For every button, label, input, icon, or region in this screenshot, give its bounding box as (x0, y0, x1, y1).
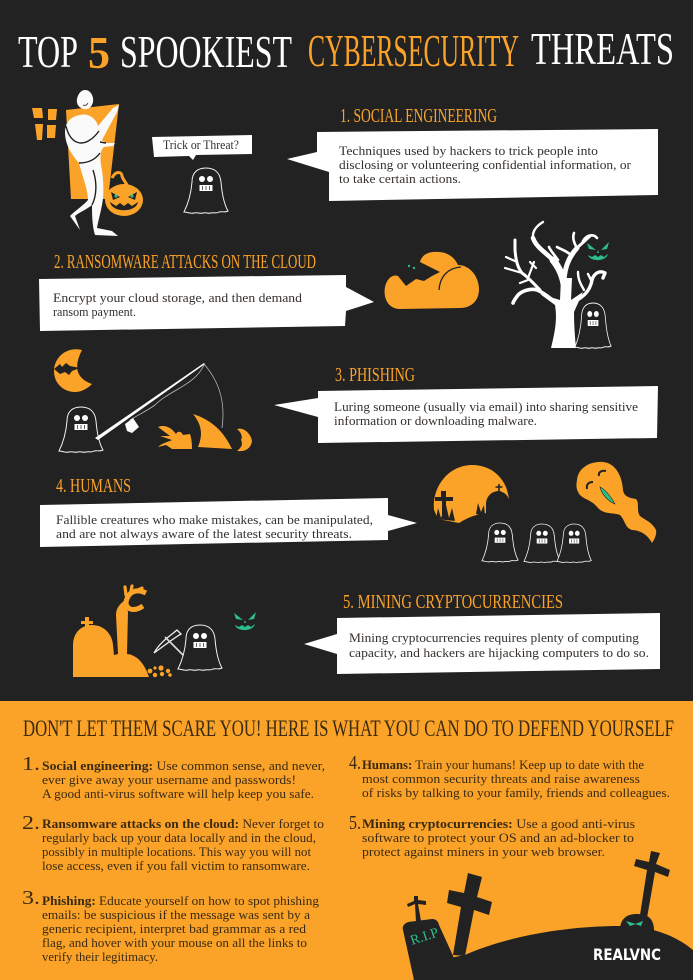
illustration: man at door with windows (32, 90, 119, 236)
tip 2 (22, 812, 324, 873)
icon: green eyes (626, 921, 643, 926)
callout: humans: and are not always aware of the latest security threats. (56, 527, 352, 541)
icon: cloud with bat (385, 252, 479, 309)
heading: ransomware: 2. RANSOMWARE ATTACKS ON THE CLOUD (54, 251, 316, 273)
tip 2: 2. (22, 812, 40, 834)
panel: threat 3 phishing (54, 349, 658, 452)
tip 5 (349, 812, 635, 859)
logo: RealVNC: REALVNC (593, 945, 661, 964)
icon: pumpkin (105, 172, 143, 216)
tip 3: verify their legitimacy. (42, 950, 158, 964)
icon: green jack-o-lantern face (234, 612, 256, 630)
callout: mining: Mining cryptocurrencies requires plenty of computing (349, 631, 640, 645)
tip 2: Ransomware attacks on the cloud: Never forget to (42, 817, 324, 831)
icon: moon with bat (54, 349, 92, 392)
icon: ghost (575, 303, 611, 348)
icon: moon with graveyard (434, 465, 510, 523)
tip 4: most common security threats and raise awareness (362, 772, 640, 786)
icon: orange spirit (576, 462, 656, 543)
icon: pickaxe (154, 630, 186, 658)
tip 4: of risks by talking to your family, friends and colleagues. (362, 786, 670, 800)
callout: social engineering: to take certain actions. (339, 172, 461, 186)
callout: phishing (274, 386, 658, 443)
panel: threat 1 social engineering (32, 90, 658, 236)
icon: green jack-o-lantern face (587, 242, 609, 260)
tip 1: 1. (22, 753, 40, 775)
heading: social engineering: 1. SOCIAL ENGINEERING (340, 105, 497, 127)
illustration: graveyard hill (403, 851, 693, 980)
tip 3: generic recipient, interpret bad grammar as a red (42, 922, 307, 936)
callout: ransomware (39, 275, 374, 331)
tip 2: regularly back up your data locally and in the cloud, (42, 831, 316, 845)
title: TOP (18, 26, 78, 77)
tip 1: ever give away your username and passwords! (42, 773, 296, 787)
callout: mining (304, 613, 660, 674)
callout: mining: capacity, and hackers are hijacking computers to do so. (349, 646, 649, 660)
icon: ghost (178, 625, 222, 670)
tip 2: lose access, even if you fall victim to ransomware. (42, 859, 310, 873)
callout: humans: Fallible creatures who make mistakes, can be manipulated, (56, 513, 373, 527)
tip 3: flag, and hover with your mouse on all the links to (42, 936, 307, 950)
tip 4: Humans: Train your humans! Keep up to date with the (362, 758, 644, 772)
tip 3: emails: be suspicious if the message was sent by a (42, 908, 310, 922)
icon: ghost (184, 168, 228, 213)
icon: ghost (59, 407, 103, 452)
heading: phishing: 3. PHISHING (335, 364, 415, 386)
icon: dead tree (505, 222, 605, 348)
icon: tombstone with hand (73, 586, 172, 677)
panel: threat 4 humans (40, 462, 656, 562)
tip 1 (22, 753, 325, 801)
panel background (0, 701, 693, 980)
callout: social engineering: disclosing or volunteering confidential information, or (339, 158, 632, 172)
tip 2: possibly in multiple locations. This way you will not (42, 845, 312, 859)
tip 5: 5. (349, 812, 361, 834)
panel: defend yourself (0, 701, 693, 980)
title (18, 23, 674, 78)
callout: humans (40, 498, 417, 547)
title: 5 (88, 27, 110, 78)
speech bubble: Trick or Threat: Trick or Threat? (163, 138, 239, 152)
tip 3: Phishing: Educate yourself on how to spot phishing (42, 894, 320, 908)
tip 5: software to protect your OS and an ad-blocker to (362, 831, 634, 845)
heading: mining: 5. MINING CRYPTOCURRENCIES (343, 591, 563, 613)
callout: social engineering: Techniques used by hackers to trick people into (339, 144, 598, 158)
callout: phishing: information or downloading malware. (334, 414, 537, 428)
text: RIP: R.I.P (409, 926, 441, 949)
callout: social engineering (287, 129, 658, 201)
title: CYBERSECURITY (308, 25, 519, 76)
tip 5: protect against miners in your web browser. (362, 845, 605, 859)
tip 1: Social engineering: Use common sense, and never, (42, 759, 325, 773)
tip 4 (349, 752, 670, 800)
icon: shark fin with splash (158, 414, 252, 451)
icon: fishing rod (95, 363, 223, 440)
tip 3: 3. (22, 887, 40, 909)
tip 5: Mining cryptocurrencies: Use a good anti-virus (362, 817, 635, 831)
panel: threat 2 ransomware (39, 222, 611, 348)
speech bubble: Trick or Threat (152, 135, 252, 160)
tip 4: 4. (349, 752, 361, 774)
tip 3 (22, 887, 320, 964)
icon: three ghosts (482, 523, 591, 562)
callout: phishing: Luring someone (usually via email) into sharing sensitive (334, 400, 638, 414)
title: SPOOKIEST (120, 26, 292, 77)
panel: threat 5 mining (73, 586, 660, 677)
tip 1: A good anti-virus software will help keep you safe. (42, 787, 314, 801)
heading: humans: 4. HUMANS (56, 475, 131, 497)
callout: ransomware: Encrypt your cloud storage, and then demand (53, 291, 303, 305)
callout: ransomware: ransom payment. (53, 305, 136, 319)
